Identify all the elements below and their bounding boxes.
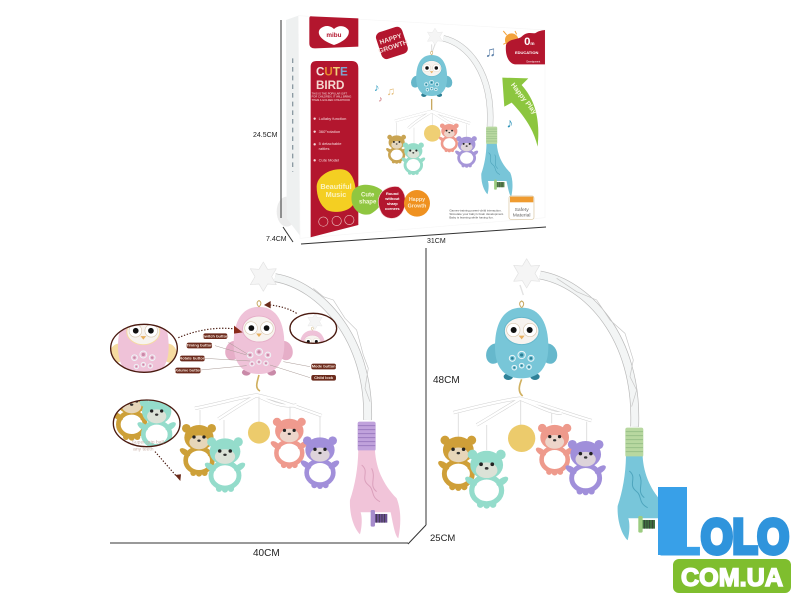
- blue arm: [540, 275, 637, 427]
- dimension: box depth: 7.4CM: [266, 236, 287, 243]
- bear: red: [269, 418, 309, 469]
- label: child lock: Child lock: [314, 375, 334, 380]
- green arrow: happy play: Happy Play: [509, 82, 538, 116]
- callout: hanging star: [289, 312, 338, 344]
- badge: round without sharp corners: corners: [385, 206, 400, 211]
- badge: cute shape: shape: [359, 199, 377, 205]
- badge: happy growth: [404, 190, 430, 217]
- blue cross arm: [453, 398, 592, 450]
- badge: beautiful music: Beautiful: [320, 182, 352, 191]
- education age badge: 0m: [524, 36, 535, 48]
- pink cross arm: [195, 395, 322, 438]
- green arrow: happy play: [502, 78, 538, 147]
- blue hook: [519, 379, 523, 396]
- box product: mobile: [385, 28, 513, 197]
- red logo tab: [309, 16, 358, 48]
- feature list: [313, 116, 346, 163]
- dimension: box depth: [266, 227, 293, 243]
- logo letter L: L: [658, 509, 700, 565]
- dimension: product height: 48CM: [433, 375, 460, 386]
- bear: tiger: [178, 424, 220, 477]
- feature list: Lullaby function: [319, 116, 346, 121]
- string: [520, 285, 523, 295]
- pink star: [250, 262, 276, 291]
- callout: rattles: Super grip ball: [132, 440, 164, 446]
- blue owl: [484, 301, 560, 380]
- music notes left: [374, 82, 395, 104]
- music notes left: ♪: [374, 82, 379, 94]
- bear: purple: [299, 436, 341, 489]
- music notes left: ♫: [387, 86, 395, 98]
- tagline: THEM A GOLDEN CHILDHOOD: [312, 98, 350, 102]
- callout: rattles: [112, 399, 181, 452]
- dimension: box width: [301, 227, 546, 245]
- box front face: [298, 16, 545, 238]
- dotted arrow: to owl: [178, 326, 243, 338]
- bear: tiger: [437, 436, 480, 491]
- education age badge: EDUCATION: [515, 50, 538, 55]
- badge: cute shape: [351, 185, 384, 215]
- label: volume button: Volume button: [174, 368, 202, 373]
- happy growth tag: HAPPY: [379, 33, 403, 46]
- box fine print: Games-training parent-child interaction.: [449, 208, 502, 212]
- feature list: Cute Model: [319, 158, 339, 163]
- tagline: THIS IS THE POPULAR GIFT: [312, 92, 347, 95]
- dimension: box height: 24.5CM: [253, 132, 278, 139]
- logo green plate: COM.UA: [681, 564, 783, 592]
- label: mode button: Mode button: [312, 364, 336, 369]
- title line two: BIRD: [316, 79, 344, 92]
- feature list: 360°rotation: [319, 129, 340, 134]
- dimension: product depth: 25CM: [430, 533, 455, 544]
- pink owl: [223, 301, 295, 376]
- box fine print: Baby is learning while having fun.: [449, 216, 494, 220]
- box fine print: Stimulate your baby's brain development.: [449, 212, 504, 216]
- music notes left: ♪: [378, 95, 382, 104]
- product box: [277, 16, 545, 238]
- blue ball: [508, 425, 535, 452]
- pink hook: [257, 375, 260, 391]
- safety material tag: [509, 196, 534, 219]
- certification icons: [319, 215, 354, 226]
- red logo tab: mibu: [326, 32, 342, 39]
- watermark logo: [658, 487, 791, 593]
- callout: owl buttons: [110, 324, 178, 373]
- bear: mint: [464, 450, 510, 509]
- feature list: 5 detachable: [319, 141, 341, 146]
- blue mobile: [437, 259, 668, 544]
- badge: cute shape: Cute: [361, 192, 374, 198]
- pink clamp: [350, 422, 400, 538]
- bear: red: [534, 424, 575, 476]
- education age badge: Development: [526, 61, 541, 64]
- badge: round without sharp corners: without: [384, 196, 400, 201]
- dotted arrow: to bears: [155, 452, 181, 481]
- label: child lock: [311, 375, 336, 381]
- label: switch button: Switch button: [202, 333, 229, 338]
- education age badge: [503, 30, 545, 64]
- happy growth tag: [373, 25, 411, 61]
- bear: mint: [203, 437, 247, 493]
- label: timing button: Timing button: [186, 343, 213, 348]
- pink arm: [275, 278, 370, 420]
- dimension: product width: 40CM: [253, 548, 280, 559]
- badge: happy growth: Growth: [408, 204, 426, 210]
- box side panel: [277, 16, 300, 236]
- dotted arrow: to hook: [264, 301, 297, 313]
- dimension: product depth: [408, 525, 455, 544]
- pink mobile with callouts: [107, 262, 400, 538]
- music note right: ♪: [507, 116, 513, 131]
- blue clamp: [618, 428, 668, 544]
- badge: beautiful music: Music: [326, 190, 346, 199]
- badge: beautiful music: [317, 169, 356, 212]
- bear: purple: [564, 440, 607, 495]
- red feature panel: [311, 61, 358, 237]
- pink ball: [248, 422, 270, 444]
- title: cute bird: CUTE: [316, 66, 348, 79]
- badge: round without sharp corners: [378, 186, 405, 218]
- badge: happy growth: Happy: [409, 197, 425, 203]
- feature list: rattles: [319, 146, 330, 151]
- happy growth tag: GROWTH: [378, 39, 409, 55]
- music note top right: ♫: [485, 45, 496, 61]
- safety material tag: Safety: [515, 207, 529, 213]
- badge: round without sharp corners: sharp: [387, 201, 398, 206]
- label: rotate button: Rotate button: [179, 356, 206, 361]
- button labels: [174, 333, 336, 381]
- safety material tag: Material: [513, 212, 531, 218]
- badge: round without sharp corners: Round: [386, 191, 399, 196]
- blue star: [514, 259, 540, 288]
- dimension: box width: 31CM: [427, 238, 446, 245]
- tagline: FOR CHILDREN, IT WILL BRING: [312, 95, 351, 99]
- callout: rattles: any teeth: [133, 446, 154, 452]
